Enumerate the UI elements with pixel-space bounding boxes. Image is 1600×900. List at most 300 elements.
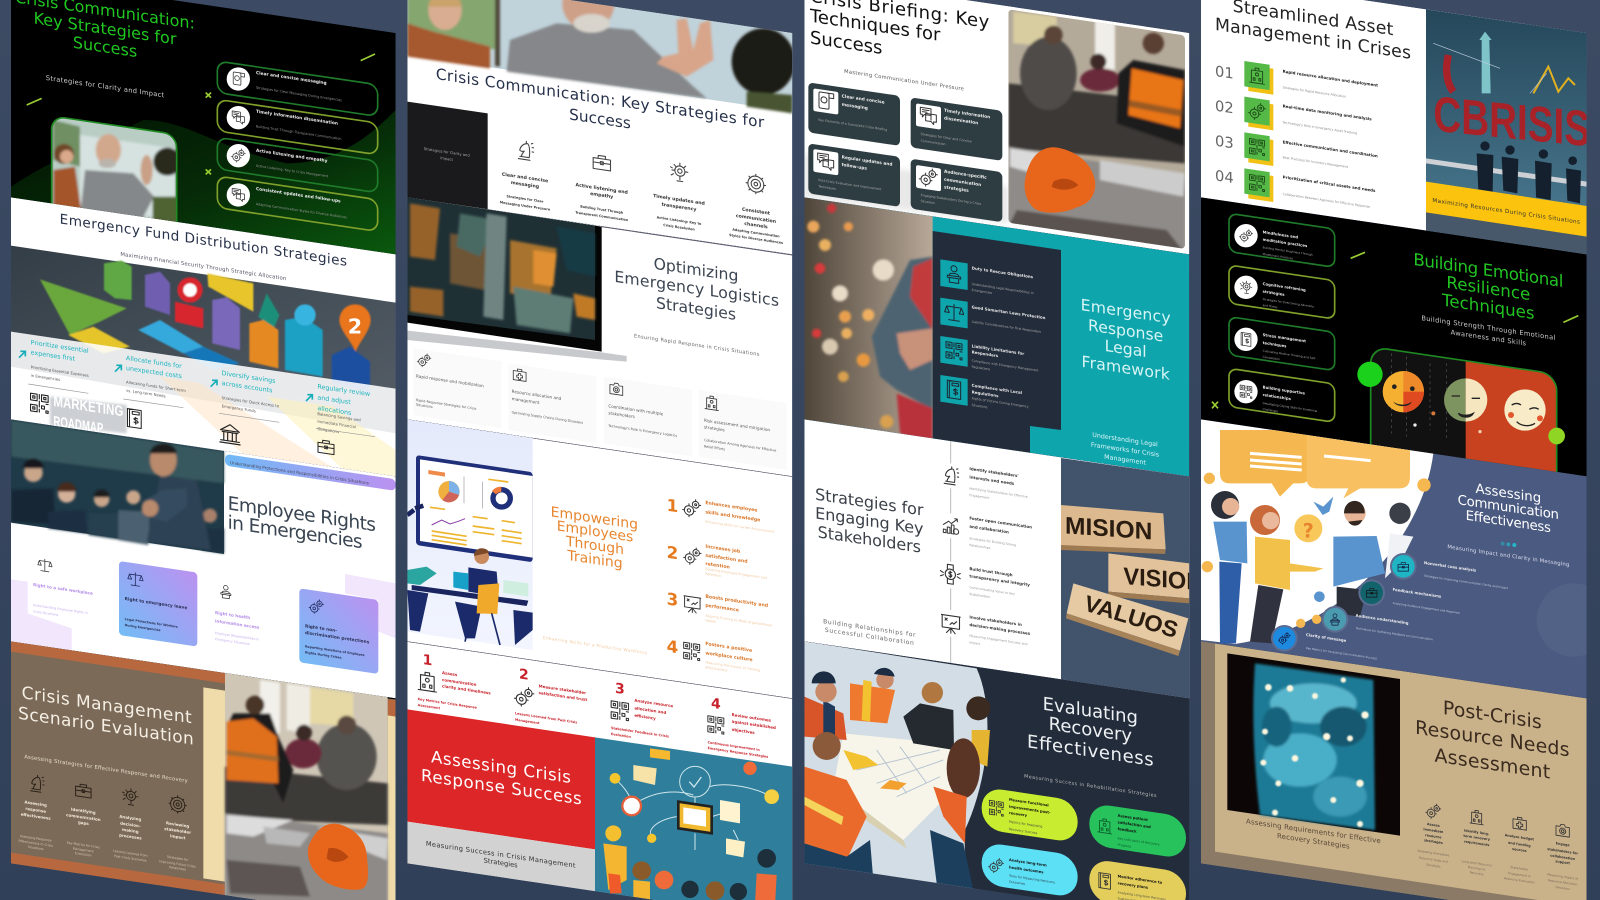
item 3: Stakeholder Feedback in Crisis [611, 726, 669, 739]
card: cognitive reframing: Cognitive reframing [1263, 281, 1306, 292]
title: Emergency Fund Distribution Strategies [60, 211, 347, 270]
card: timely information dissemination: Building Trust Through Transparent Communication [256, 124, 341, 141]
pill: analyze long-term outcomes [982, 842, 1078, 898]
card: building supportive relationships: Developing Coping Skills for Emotional [1263, 401, 1317, 413]
column: clear and concise messaging [500, 140, 551, 212]
column: engage stakeholders for collaboration support: Resource Allocation [1548, 878, 1577, 887]
card: coordination with multiple stakeholders [604, 377, 692, 456]
item: right to health information access [215, 585, 260, 646]
card: clear and concise messaging: Key Elements of a Successful Crisis Briefing [818, 118, 887, 132]
column: reviewing stakeholder impact: Responses [169, 865, 186, 872]
item 4: Emergency Response Strategies [708, 746, 768, 759]
item 3: 3 [615, 681, 625, 698]
card: building supportive relationships [1229, 368, 1335, 422]
card: clear and concise messaging: Strategies for Clear Messaging During Emergencies [256, 86, 342, 102]
column: consistent communication channels [729, 173, 783, 245]
item 01: Rapid resource allocation and deployment [1283, 69, 1378, 88]
decorative marks [27, 54, 375, 174]
column: reviewing stakeholder impact [159, 794, 196, 872]
item 4: Continuous Improvement in [708, 740, 760, 752]
item 01: 01 [1215, 63, 1234, 83]
card: cognitive reframing: and Stress [1263, 303, 1278, 309]
image: mission vision values wood blocks: MISION [1065, 512, 1152, 545]
column: assessing response effectiveness: Assessing [24, 799, 47, 808]
item: liability limitations for responders: Compliance with Emergency Management [972, 359, 1039, 373]
pill: monitor adherence: Monitor adherence to [1118, 874, 1163, 885]
subtitle: Building Relationships for [823, 618, 916, 639]
column: identify long-term recovery requirements [1462, 810, 1492, 876]
card: consistent updates and follow-ups: Consistent updates and follow-ups [256, 186, 341, 205]
column: analyze budget and funding sources [1504, 817, 1535, 885]
column: clear and concise messaging: messaging [511, 180, 539, 190]
column: identifying communication gaps: Management [73, 846, 94, 854]
subtitle: Recovery Strategies [1277, 831, 1350, 851]
card: timely information dissemination: Strategies for Clear and Concise [921, 132, 972, 144]
item: involve stakeholders: Measuring Engagement Success and [969, 634, 1028, 646]
item: prioritize essential expenses: Prioritizing Essential Expenses [31, 364, 89, 378]
title: Employee Rights [228, 493, 376, 536]
item: regularly review: Obligations [317, 426, 339, 434]
subtitle: Strategies for Clarity and Impact [46, 74, 165, 99]
item 04: Prioritization of critical assets and needs [1283, 174, 1376, 193]
column: identifying communication gaps: gaps [78, 820, 89, 826]
card: stress management: Cultivating Positive Thinking and Self- [1263, 349, 1316, 361]
item 2: Increases job [705, 544, 741, 555]
subtitle: Understanding Legal [1092, 432, 1158, 449]
item: clarity of message: Key Metrics for Assessing Communication Success [1306, 646, 1378, 661]
item 4 [667, 636, 760, 673]
photo: presenter with colleagues [52, 118, 176, 222]
card: active listening and empathy: Active Listening: Key to Crisis Management [256, 164, 329, 178]
item 1: Key Metrics for Crisis Response [418, 697, 478, 710]
item: good samaritan laws protection: Good Samaritan Laws Protection [972, 304, 1046, 320]
column: clear and concise messaging: Strategies for Clear [507, 194, 544, 204]
pill: assess patient satisfaction: Assess patient [1118, 814, 1148, 822]
title: Techniques for [809, 6, 941, 46]
column: reviewing stakeholder impact: Improving Future Crisis [159, 859, 196, 869]
subtitle: Measuring Impact and Clarity in Messaging [1447, 544, 1569, 568]
title: Training [566, 548, 623, 572]
title: in Emergencies [228, 512, 363, 553]
subtitle: Enhancing Skills for a Productive Workforce [543, 635, 647, 655]
item: compliance with local regulations [940, 375, 1029, 409]
card: consistent updates and follow-ups [217, 176, 378, 231]
item: regularly review: Balancing Savings and [317, 411, 361, 422]
item: allocate funds [115, 355, 186, 429]
item 04 [1215, 167, 1376, 209]
yellow banner: Maximizing Resources During Crisis Situations [1432, 198, 1580, 226]
card: clear and concise messaging [217, 61, 378, 116]
column: assessing response effectiveness: Assessing Response [20, 834, 52, 843]
column: assessing response effectiveness: Effectiveness in Crisis [18, 839, 53, 848]
card: resource allocation and management: Resource allocation and [512, 389, 562, 401]
panel: engaging key stakeholders slide [804, 419, 1203, 698]
title: Stakeholders [818, 522, 921, 557]
title: Assessment [1434, 744, 1551, 784]
column: reviewing stakeholder impact: impact [170, 833, 185, 840]
item 2: 2 [519, 666, 529, 684]
item: liability limitations for responders: Regulations [972, 365, 990, 371]
card: rapid response and mobilization [413, 348, 502, 428]
column: identifying communication gaps: communication [66, 812, 101, 822]
title: Management in Crises [1215, 15, 1411, 64]
item: involve stakeholders: Impact [969, 640, 981, 646]
item 1: clarity and timeliness [442, 683, 491, 696]
panel: emergency logistics slide [407, 197, 792, 476]
illustration: team discussing feedback: ? [1303, 519, 1314, 542]
item: right to health information access: Employer Responsibilities in [215, 631, 259, 642]
panel: crisis management scenario evaluation slide [11, 641, 396, 900]
image: mission vision values wood blocks: VISION [1123, 563, 1203, 596]
item: foster open communication: Strategies for Building Strong [969, 536, 1016, 547]
panel: emergency response legal framework slide [804, 197, 1189, 476]
title: Employees [557, 518, 633, 546]
card: stress management: Stress management [1263, 332, 1306, 343]
card: timely information dissemination: Timely information [944, 108, 990, 120]
item: feedback mechanisms [1358, 579, 1460, 615]
card: timely information dissemination: dissemination [944, 115, 978, 126]
column: consistent communication channels: Styles for Diverse Audiences [729, 233, 783, 245]
item: regularly review [306, 383, 375, 455]
item 1: skills and knowledge [705, 509, 760, 523]
title: Success [569, 106, 631, 133]
title [19, 686, 192, 744]
item: nonverbal cues analysis: Nonverbal cues analysis [1424, 560, 1477, 573]
item: duty to rescue obligations: Understanding Legal Responsibilities in [972, 282, 1034, 295]
column: engage stakeholders for collaboration support: Decisions [1556, 885, 1570, 891]
title [614, 254, 779, 324]
card: audience-specific communication strategies: Audience-specific [944, 169, 987, 181]
card: coordination with multiple stakeholders: Technology's Role in Emergency Logistics [607, 424, 677, 438]
card: risk assessment and mitigation [698, 390, 787, 470]
panel: crisis briefing slide [804, 0, 1189, 254]
grey subtitle block: Measuring Success in Crisis Management [426, 840, 576, 870]
column: identify long-term recovery requirements: requirements [1464, 839, 1489, 847]
title: Optimizing [654, 254, 738, 285]
card: regular updates and follow-ups: Regular updates and [842, 154, 892, 168]
item: build trust: Stakeholders [969, 592, 990, 599]
column: active listening and empathy: empathy [590, 191, 613, 200]
item: compliance with local regulations: Regulations [972, 389, 999, 398]
item 3: efficiency [634, 713, 656, 721]
column: assess immediate resource shortages: immediate [1423, 827, 1444, 834]
photo: responder and life vest [225, 673, 388, 900]
pill: assess patient satisfaction: Progress [1118, 843, 1131, 849]
yellow banner [1426, 182, 1587, 237]
pill: monitor adherence: recovery plans [1118, 881, 1149, 890]
column: reviewing stakeholder impact: Strategies for [167, 855, 189, 862]
item: right to a safe workplace: Understanding Employee Rights in [33, 603, 88, 615]
item 1: Enhancing Skills for Career Advancement [705, 520, 775, 534]
card: right to non-discrimination protections: Rights During Crises [305, 650, 342, 660]
title [1413, 249, 1563, 323]
card: building supportive relationships: Challenges [1263, 407, 1279, 413]
item: right to a safe workplace: Crisis Situations [33, 609, 59, 617]
item: prioritize essential expenses [19, 339, 89, 413]
item: prioritize essential expenses: expenses first [31, 349, 75, 363]
black subtitle block: Impact [440, 156, 454, 162]
card: stress management: Compassion [1263, 355, 1280, 361]
item 2 [667, 542, 767, 580]
item 4: Measuring the Impact of Training [705, 660, 760, 672]
card: right to emergency leave: During Emergencies [125, 623, 161, 632]
item 01 [1215, 61, 1378, 99]
item 04: Collaboration Between Agencies for Effective Response [1283, 192, 1370, 209]
illustration: team at dashboard [407, 419, 533, 650]
card: regular updates and follow-ups: follow-ups [842, 162, 867, 172]
item: foster open communication [938, 513, 1032, 550]
item 03: 03 [1215, 133, 1234, 152]
title: Through [565, 534, 624, 558]
item: allocate funds: Allocate funds for [126, 355, 182, 370]
item 2: Lessons Learned from Past Crisis [515, 711, 577, 725]
card: coordination with multiple stakeholders: Coordination with multiple [608, 403, 664, 417]
black subtitle block: Strategies for Clarity and [424, 147, 470, 158]
panel: evaluating recovery effectiveness slide [804, 641, 1189, 900]
image: faces with emotions [1357, 347, 1565, 608]
card: right to emergency leave [119, 561, 197, 647]
panel: crisis communication white slide [407, 0, 795, 254]
item 3: Analyze resource [634, 698, 673, 708]
item: involve stakeholders: Involve stakeholders in [969, 614, 1022, 627]
title: Success [73, 33, 137, 61]
image: crisis sign and silhouettes [1426, 9, 1590, 257]
item: identify stakeholders: interests and needs [969, 474, 1015, 486]
column: engage stakeholders for collaboration support: support [1555, 859, 1570, 865]
column: identifying communication gaps: Evaluation [75, 851, 92, 858]
item: regularly review: Regularly review [317, 383, 370, 398]
card: regular updates and follow-ups: Techniques [817, 184, 836, 191]
item: good samaritan laws protection: Liability Considerations for First Responders [972, 320, 1041, 334]
column: analyze budget and funding sources: sources [1512, 847, 1527, 853]
item 02: 02 [1215, 98, 1234, 117]
title: Crisis Communication: Key Strategies for [436, 65, 765, 132]
title: Building Emotional [1413, 249, 1563, 291]
card: building supportive relationships: relationships [1263, 392, 1292, 401]
item: duty to rescue obligations: Emergencies [972, 288, 992, 295]
subtitle: Ensuring Rapid Response in Crisis Situations [634, 333, 760, 358]
pill: monitor adherence [1089, 858, 1186, 900]
illustration: data network and people [595, 737, 792, 900]
column: analyzing decision-making processes: Lessons Learned from [113, 849, 148, 858]
column: analyze budget and funding sources: Analyze budget [1505, 833, 1534, 842]
column: identify long-term recovery requirements: Recovery [1470, 870, 1484, 876]
item: prioritize essential expenses: in Emergencies [31, 373, 60, 382]
title: Techniques [1441, 289, 1535, 323]
column: identify long-term recovery requirements: Identify long- [1464, 828, 1490, 836]
column: active listening and empathy: Active listening and [575, 182, 628, 196]
image: goal blocks on floor: 2 [348, 314, 362, 338]
pill: analyze long-term outcomes: Analyze long-term [1009, 858, 1047, 868]
column: analyze budget and funding sources: Resource Evaluation [1504, 876, 1535, 885]
item: nonverbal cues analysis: Strategies for Improving Communication Clarity and Impact [1424, 574, 1509, 590]
column: analyzing decision-making processes [113, 788, 148, 863]
item 3: Aligning Training to Meet Organizational [705, 614, 772, 628]
panel: assessing communication effectiveness slide [1201, 419, 1600, 698]
item 4: 4 [711, 696, 721, 713]
title [809, 0, 990, 59]
pill: assess patient satisfaction: Key Indicators of Recovery [1118, 836, 1160, 847]
photo: responder with bokeh lights [804, 197, 933, 447]
card: cognitive reframing: Strategies for Overcoming Adversity [1263, 297, 1314, 309]
card: mindfulness and meditation: meditation practices [1263, 237, 1308, 248]
subtitle: Assessing Strategies for Effective Response and Recovery [24, 754, 188, 784]
image: mission vision values wood blocks: VALUOS [1081, 590, 1181, 643]
title [815, 485, 924, 557]
illustration: workers around plan table [804, 641, 990, 890]
column: analyze budget and funding sources: Stakeholder [1510, 865, 1529, 872]
item: audience understanding: Audience understanding [1356, 613, 1409, 626]
dark list panel [933, 231, 1061, 476]
item: right to health information access: Right to health [215, 610, 250, 620]
title: Communication [1458, 493, 1559, 523]
card: risk assessment and mitigation: Risk assessment and mitigation [704, 418, 770, 432]
item 3 [667, 588, 772, 628]
item 2: Boosting Employee Engagement and [705, 567, 767, 580]
pill: assess patient satisfaction: feedback [1118, 827, 1137, 834]
item: build trust: transparency and integrity [969, 573, 1030, 587]
photo: presenter close-up [407, 0, 795, 113]
panel: empowering employees slide [407, 419, 792, 698]
column: assess immediate resource shortages: shortages [1424, 838, 1443, 845]
item 4: workplace culture [705, 650, 753, 663]
card: audience-specific communication strategies: communication [944, 177, 981, 188]
title: Response [1088, 316, 1163, 346]
card: right to emergency leave: Legal Protections for Workers [125, 617, 178, 629]
title [1081, 295, 1171, 384]
card: resource allocation and management: Optimizing Supply Chains During Disasters [512, 410, 583, 425]
item 3: allocation and [634, 705, 666, 715]
item: prioritize essential expenses: Prioritize essential [31, 339, 89, 355]
red title block: Assessing Crisis [431, 746, 571, 787]
subtitle [1091, 432, 1159, 467]
banner: Understanding Protections and Responsibilities in Crisis Situations [230, 460, 369, 486]
item: right to health information access: Emergency Situations [215, 637, 250, 646]
item 1: 1 [423, 652, 432, 669]
column: active listening and empathy: Transparent Communication [575, 210, 629, 222]
item 3: performance [705, 603, 739, 614]
subtitle: Awareness and Skills [1451, 328, 1527, 348]
item 4: objectives [732, 727, 755, 735]
column: assess immediate resource shortages: Shortfalls [1426, 863, 1441, 869]
panel: crisis communication dark green slide [11, 0, 396, 257]
item 2: satisfaction and trust [539, 690, 587, 702]
item: identify stakeholders: Identify stakeholders' [969, 466, 1019, 478]
item: build trust: Communicating Value to Key [969, 585, 1015, 596]
card: cognitive reframing: strategies [1263, 289, 1285, 297]
card: timely information dissemination [911, 97, 1002, 161]
image: goal blocks on floor [11, 246, 396, 433]
item: foster open communication: and collaboration [969, 524, 1009, 535]
item: duty to rescue obligations [940, 259, 1034, 295]
title: Engaging Key [815, 503, 924, 538]
item 1 [418, 652, 491, 710]
item: right to a safe workplace: Right to a safe workplace [33, 582, 93, 596]
item: regularly review: allocations [317, 405, 351, 417]
column: consistent communication channels: Consistent [742, 207, 771, 217]
item: allocate funds: unexpected costs [126, 365, 182, 380]
title: Assessing [1476, 482, 1541, 507]
title: Success [810, 27, 882, 59]
column: consistent communication channels: Adapting Communication [732, 228, 780, 239]
column: analyzing decision-making processes: Analyzing [119, 814, 141, 822]
column: consistent communication channels: channels [744, 221, 768, 230]
pill: analyze long-term outcomes: Tools for Measuring Recovery [1008, 874, 1055, 885]
column: identify long-term recovery requirements: Planning for [1468, 865, 1486, 872]
item: allocate funds: Allocating Funds for Short-term [126, 379, 186, 393]
card: active listening and empathy: Active listening and empathy [256, 148, 328, 164]
item: involve stakeholders: decision-making processes [969, 622, 1031, 636]
item 03 [1215, 132, 1378, 169]
card: coordination with multiple stakeholders: stakeholders [608, 410, 635, 419]
item: liability limitations for responders [940, 336, 1039, 373]
column: active listening and empathy: Building Trust Through [580, 205, 624, 215]
item: diversify savings: Emergency Funds [222, 403, 256, 413]
card: risk assessment and mitigation: Collaboration Among Agencies for Effective [704, 438, 776, 453]
column: assess immediate resource shortages [1417, 803, 1449, 869]
card: audience-specific communication strategies [911, 159, 1002, 222]
card: audience-specific communication strategies: Situation [921, 199, 935, 205]
item 3: Evaluation [611, 732, 631, 739]
pill: measure functional improvements: Recovery Success [1009, 827, 1038, 835]
card: right to non-discrimination protections [299, 588, 378, 674]
image: mission vision values wood blocks [1061, 458, 1203, 698]
subtitle: Building Strength Through Emotional [1421, 314, 1555, 342]
card: right to non-discrimination protections: discrimination protections [305, 630, 370, 646]
column: identifying communication gaps [66, 784, 101, 858]
column: assess immediate resource shortages: Assessing Immediate [1417, 849, 1449, 857]
item: right to health information access: information access [215, 618, 260, 630]
title: Emergency [1081, 295, 1171, 327]
item 3: 3 [667, 588, 678, 610]
item 4: Effectiveness [705, 665, 728, 673]
photo: responder and life vest [1008, 7, 1185, 253]
item 2 [514, 666, 587, 725]
item: feedback mechanisms: Analyzing Audience Engagement and Response [1393, 601, 1460, 615]
pill: measure functional improvements [982, 787, 1078, 843]
item: identify stakeholders: Engagement [969, 493, 990, 500]
item: identify stakeholders [938, 463, 1028, 500]
title: Evaluating [1043, 694, 1138, 729]
item 4: 4 [667, 636, 678, 657]
pill: measure functional improvements: Metrics for Assessing [1009, 820, 1042, 829]
title: Post-Crisis [1443, 696, 1542, 734]
card: building supportive relationships: Building supportive [1263, 384, 1305, 396]
card: active listening and empathy [217, 137, 378, 193]
card: mindfulness and meditation: Mindfulness and [1263, 229, 1298, 240]
column: analyzing decision-making processes: Past Crisis Scenarios [114, 854, 147, 863]
column: analyze budget and funding sources: and funding [1508, 841, 1531, 848]
item: build trust [938, 562, 1030, 599]
column: timely updates and transparency [653, 162, 705, 232]
pill: analyze long-term outcomes: Outcomes [1009, 880, 1025, 886]
item: identify stakeholders: Identifying Stakeholders for Effective [969, 486, 1028, 499]
item 2: retention [705, 561, 730, 571]
item: audience understanding: Techniques for Gathering Feedback on Communication [1355, 626, 1433, 641]
column: assessing response effectiveness [18, 774, 53, 851]
column: analyze budget and funding sources: Engagement in [1508, 871, 1531, 878]
red title block: Response Success [421, 765, 582, 809]
item: nonverbal cues analysis [1390, 553, 1509, 590]
item 03: Best Practices for Inventory Management [1283, 155, 1349, 169]
title: Crisis Management [22, 683, 192, 728]
item 3: Boosts productivity and [705, 594, 768, 609]
card: mindfulness and meditation [1229, 213, 1335, 267]
column: engage stakeholders for collaboration support: collaboration [1550, 854, 1576, 861]
faded roadmap lettering: MARKETING [53, 394, 123, 420]
item 4: Review outcomes [732, 712, 772, 723]
card: risk assessment and mitigation: Relief Efforts [704, 444, 725, 451]
